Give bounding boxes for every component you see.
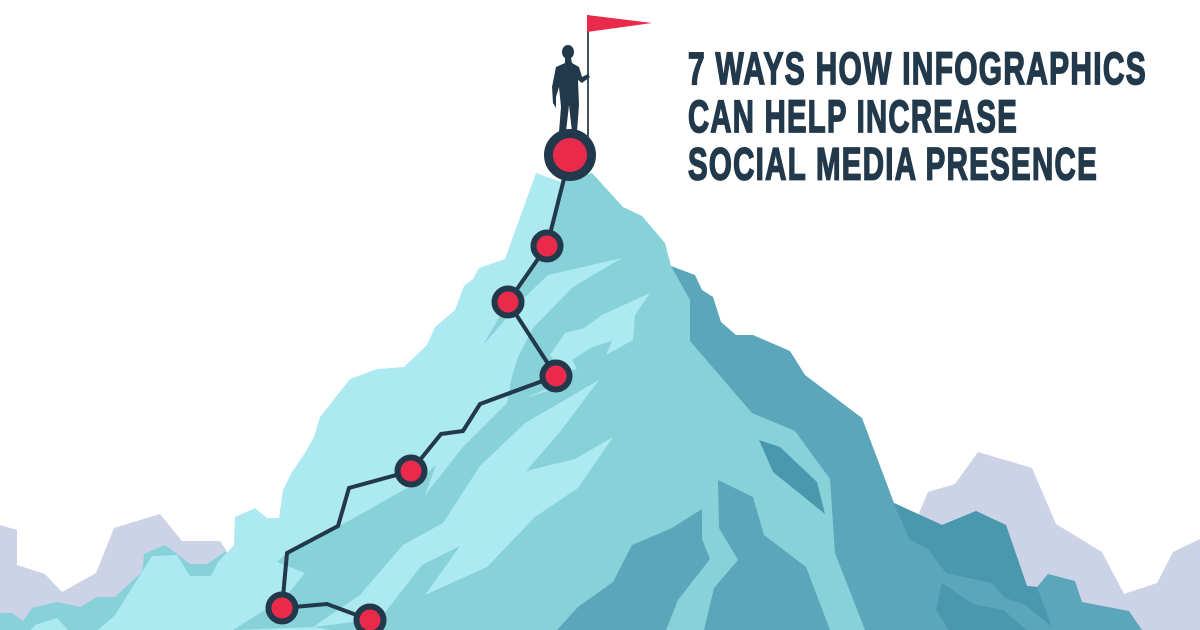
- mountain: light face silhouette: [98, 173, 640, 630]
- foothill: small light patch: [31, 618, 68, 630]
- snow: small wedge below node: [523, 385, 565, 399]
- person silhouette: [552, 45, 590, 132]
- flag pole: [587, 15, 589, 137]
- route nodes: [268, 134, 592, 630]
- rock: lower left shaded: [557, 509, 710, 630]
- foothills: teal left: [0, 545, 300, 630]
- rock: dark ridge right: [894, 503, 1052, 627]
- flag: [587, 15, 652, 32]
- rock: eye-shaped patch: [759, 440, 825, 514]
- route line: [282, 155, 570, 620]
- rock: lower centre shaded: [704, 480, 830, 630]
- title: [688, 43, 1147, 190]
- node 2: [534, 232, 560, 260]
- node 5: [398, 458, 424, 484]
- snow: large central streak: [313, 380, 613, 630]
- rock: dark lower patch: [936, 583, 1027, 630]
- snow: upper spike right of route: [550, 293, 650, 372]
- mountain: shaded right face: [650, 266, 1142, 630]
- background hills: lilac left: [0, 514, 240, 630]
- mountain: mid teal main face: [233, 173, 865, 630]
- node: summit: [548, 134, 592, 176]
- node 4: [542, 362, 570, 390]
- node 3: [494, 288, 522, 316]
- background hills: lilac right: [919, 452, 1200, 630]
- title: CAN HELP INCREASE: [688, 91, 1018, 142]
- node 7: [356, 606, 384, 630]
- node 6: [268, 594, 296, 622]
- snow: bottom thin strip: [235, 627, 330, 630]
